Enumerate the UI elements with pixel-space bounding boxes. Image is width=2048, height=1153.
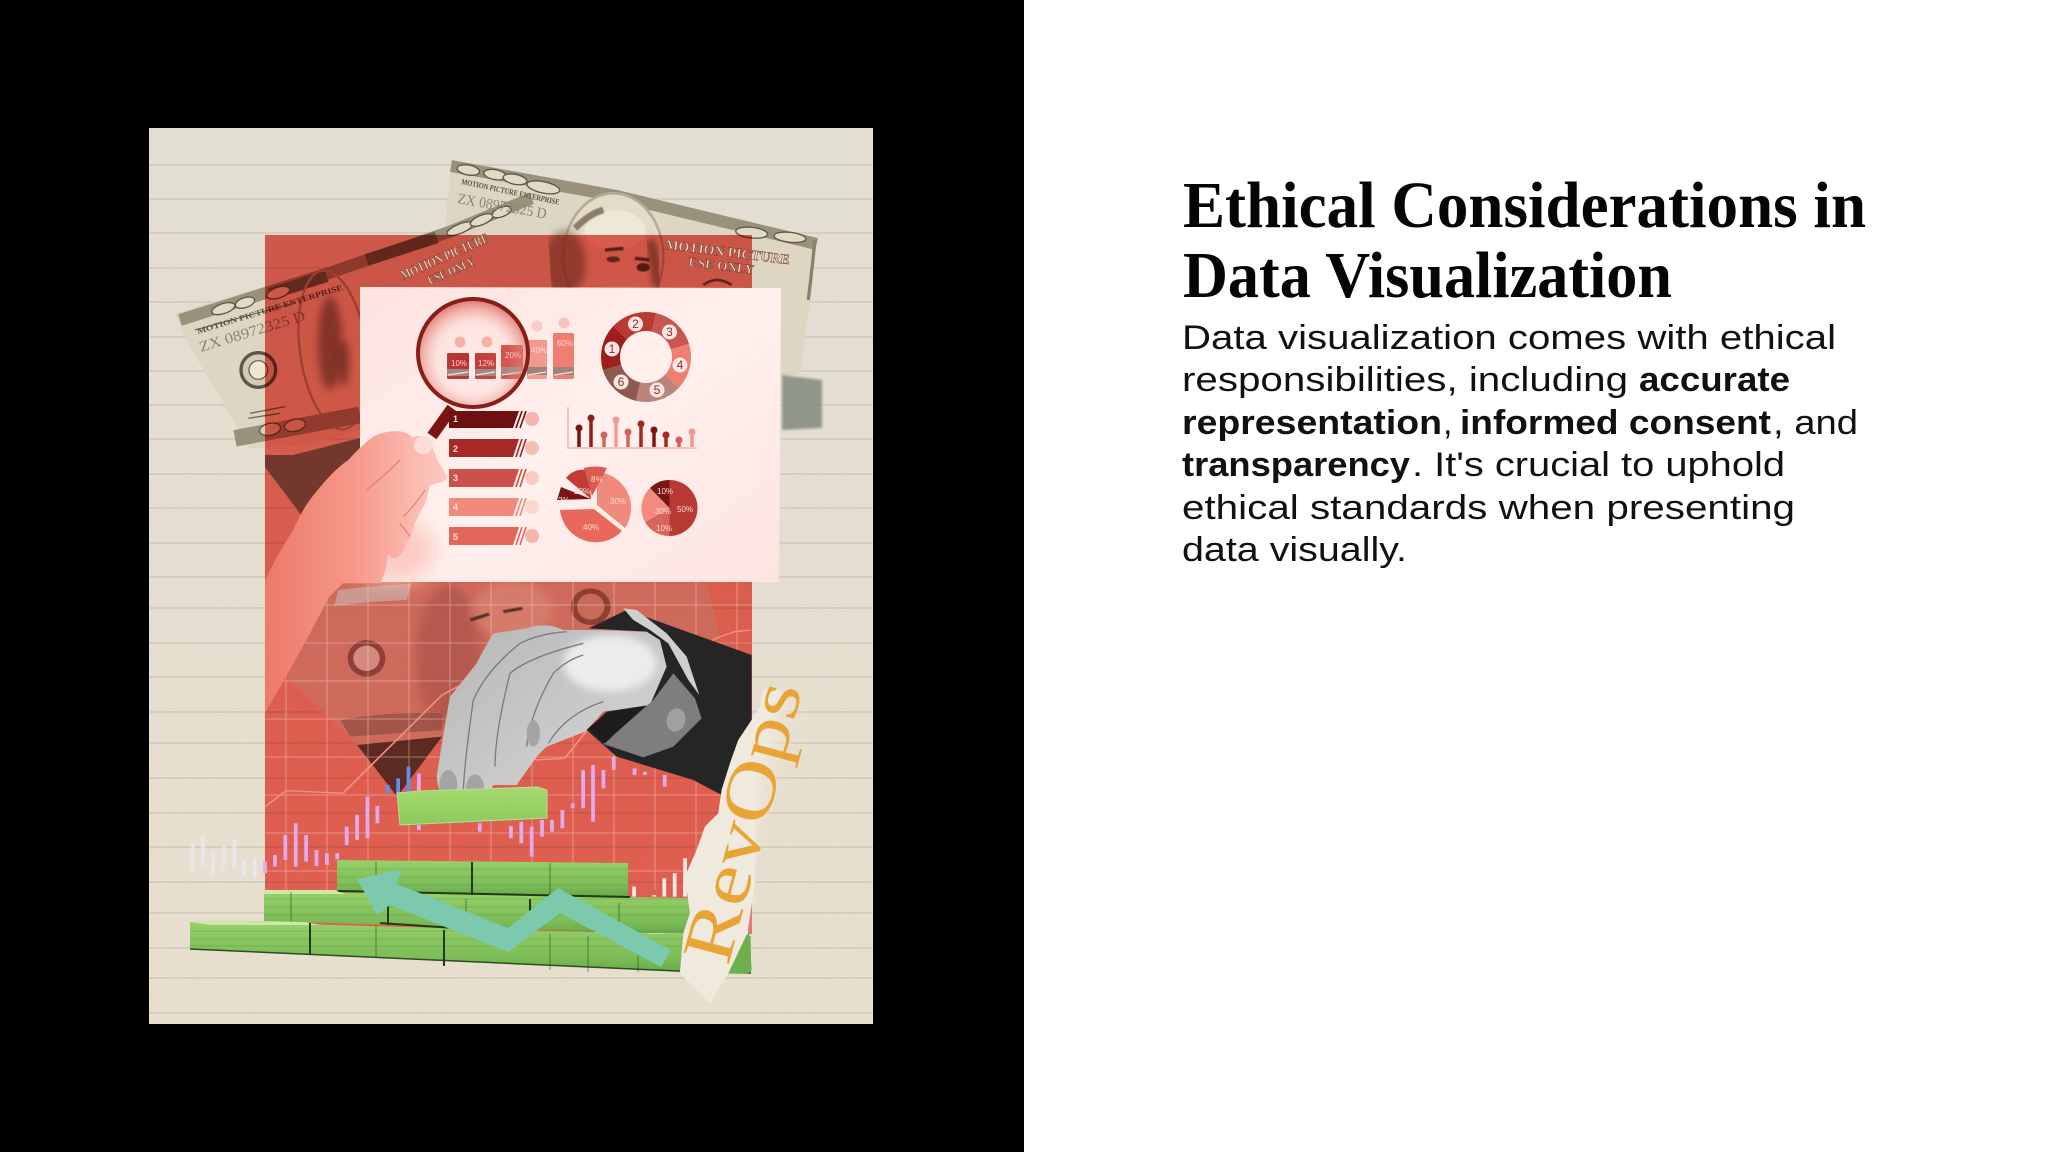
grey hand placing block xyxy=(437,625,667,802)
body paragraph: data visually. xyxy=(1182,531,1407,569)
data card xyxy=(360,287,781,582)
title xyxy=(1183,169,1866,312)
pie chart xyxy=(641,480,698,536)
pie chart: 50% xyxy=(677,505,693,514)
candlestick bars xyxy=(193,757,685,897)
teal zigzag arrow xyxy=(357,869,671,967)
donut chart: 1 xyxy=(609,342,616,356)
pie chart: 10% xyxy=(656,524,672,533)
trend line xyxy=(265,630,751,807)
lollipop chart xyxy=(568,407,697,448)
exploded pie chart: 20% xyxy=(574,487,590,496)
pie chart: 10% xyxy=(657,487,673,496)
banknote: faded lower xyxy=(286,582,720,797)
banknote: upper right xyxy=(443,160,817,377)
collage poster xyxy=(149,128,873,1024)
body paragraph: . It's crucial to uphold xyxy=(1412,446,1785,484)
body paragraph: informed consent xyxy=(1460,404,1771,442)
numbered horizontal bars: 1 xyxy=(453,414,458,424)
green block held xyxy=(397,787,547,825)
chart grid xyxy=(265,582,752,890)
dark jacket sleeve xyxy=(587,608,752,795)
bar chart with magnifier: 12% xyxy=(478,359,494,368)
red overprint captions on banknotes: USE ONLY xyxy=(688,254,756,277)
title: Data Visualization xyxy=(1183,239,1672,312)
donut chart: 3 xyxy=(666,325,673,339)
donut chart: 6 xyxy=(618,375,625,389)
body paragraph: Data visualization comes with ethical xyxy=(1182,319,1836,357)
green block stack xyxy=(190,860,751,973)
bar chart with magnifier: 10% xyxy=(451,359,467,368)
title: Ethical Considerations in xyxy=(1183,169,1866,242)
green block end past strip xyxy=(728,933,752,973)
donut chart xyxy=(596,307,696,407)
numbered horizontal bars: 5 xyxy=(453,532,458,542)
red overprint captions on banknotes xyxy=(399,231,790,288)
red overprint captions on banknotes: USE ONLY xyxy=(425,254,477,288)
body paragraph: transparency xyxy=(1182,446,1410,484)
banknote small print: MOTION PICTURE ENTERPRISE xyxy=(196,283,344,336)
dark shape under left banknote xyxy=(265,438,360,520)
donut chart: 4 xyxy=(677,358,684,372)
banknote small print: MOTION PICTURE ENTERPRISE xyxy=(461,177,560,207)
exploded pie chart: 8% xyxy=(591,475,603,484)
exploded pie chart: 40% xyxy=(583,523,599,532)
banknote: upper left xyxy=(175,195,553,448)
body paragraph: , xyxy=(1443,404,1452,442)
banknote small print: ZX 08972325 D xyxy=(456,191,548,223)
body paragraph: , and xyxy=(1773,404,1858,442)
paper background xyxy=(149,128,873,1024)
bar chart with magnifier: 20% xyxy=(505,351,521,360)
black image panel xyxy=(0,0,1024,1152)
RevOps label: RevOps xyxy=(668,673,818,971)
red edge and candle right of strip xyxy=(745,884,752,934)
banknote small print xyxy=(196,177,560,356)
body paragraph: accurate xyxy=(1639,361,1790,399)
exploded pie chart: 30% xyxy=(610,497,626,506)
icon: magnifying glass xyxy=(418,299,528,436)
donut chart: 2 xyxy=(632,317,639,331)
hand holding magnifier xyxy=(265,431,447,713)
exploded pie chart xyxy=(557,466,631,542)
pie chart: 30% xyxy=(655,507,671,516)
red overprint captions on banknotes: MOTION PICTURE xyxy=(665,238,790,268)
torn paper strip xyxy=(680,688,817,1003)
body paragraph: responsibilities, including xyxy=(1182,361,1628,399)
numbered horizontal bars: 2 xyxy=(453,444,458,454)
bar chart with magnifier: 60% xyxy=(557,339,573,348)
red square xyxy=(265,235,752,933)
donut chart: 5 xyxy=(654,383,661,397)
numbered horizontal bars: 3 xyxy=(453,473,458,483)
red overprint captions on banknotes: MOTION PICTURE xyxy=(399,231,491,284)
body paragraph xyxy=(1182,319,1858,569)
body paragraph: representation xyxy=(1182,404,1442,442)
numbered horizontal bars: 4 xyxy=(453,502,458,512)
grey torn corner of banknote xyxy=(782,375,822,430)
bar chart with magnifier xyxy=(447,318,574,379)
bar chart with magnifier: 40% xyxy=(531,346,547,355)
banknote small print: ZX 08972325 D xyxy=(197,308,308,356)
numbered horizontal bars xyxy=(449,411,539,545)
exploded pie chart: 2% xyxy=(558,496,570,505)
body paragraph: ethical standards when presenting xyxy=(1182,489,1795,527)
